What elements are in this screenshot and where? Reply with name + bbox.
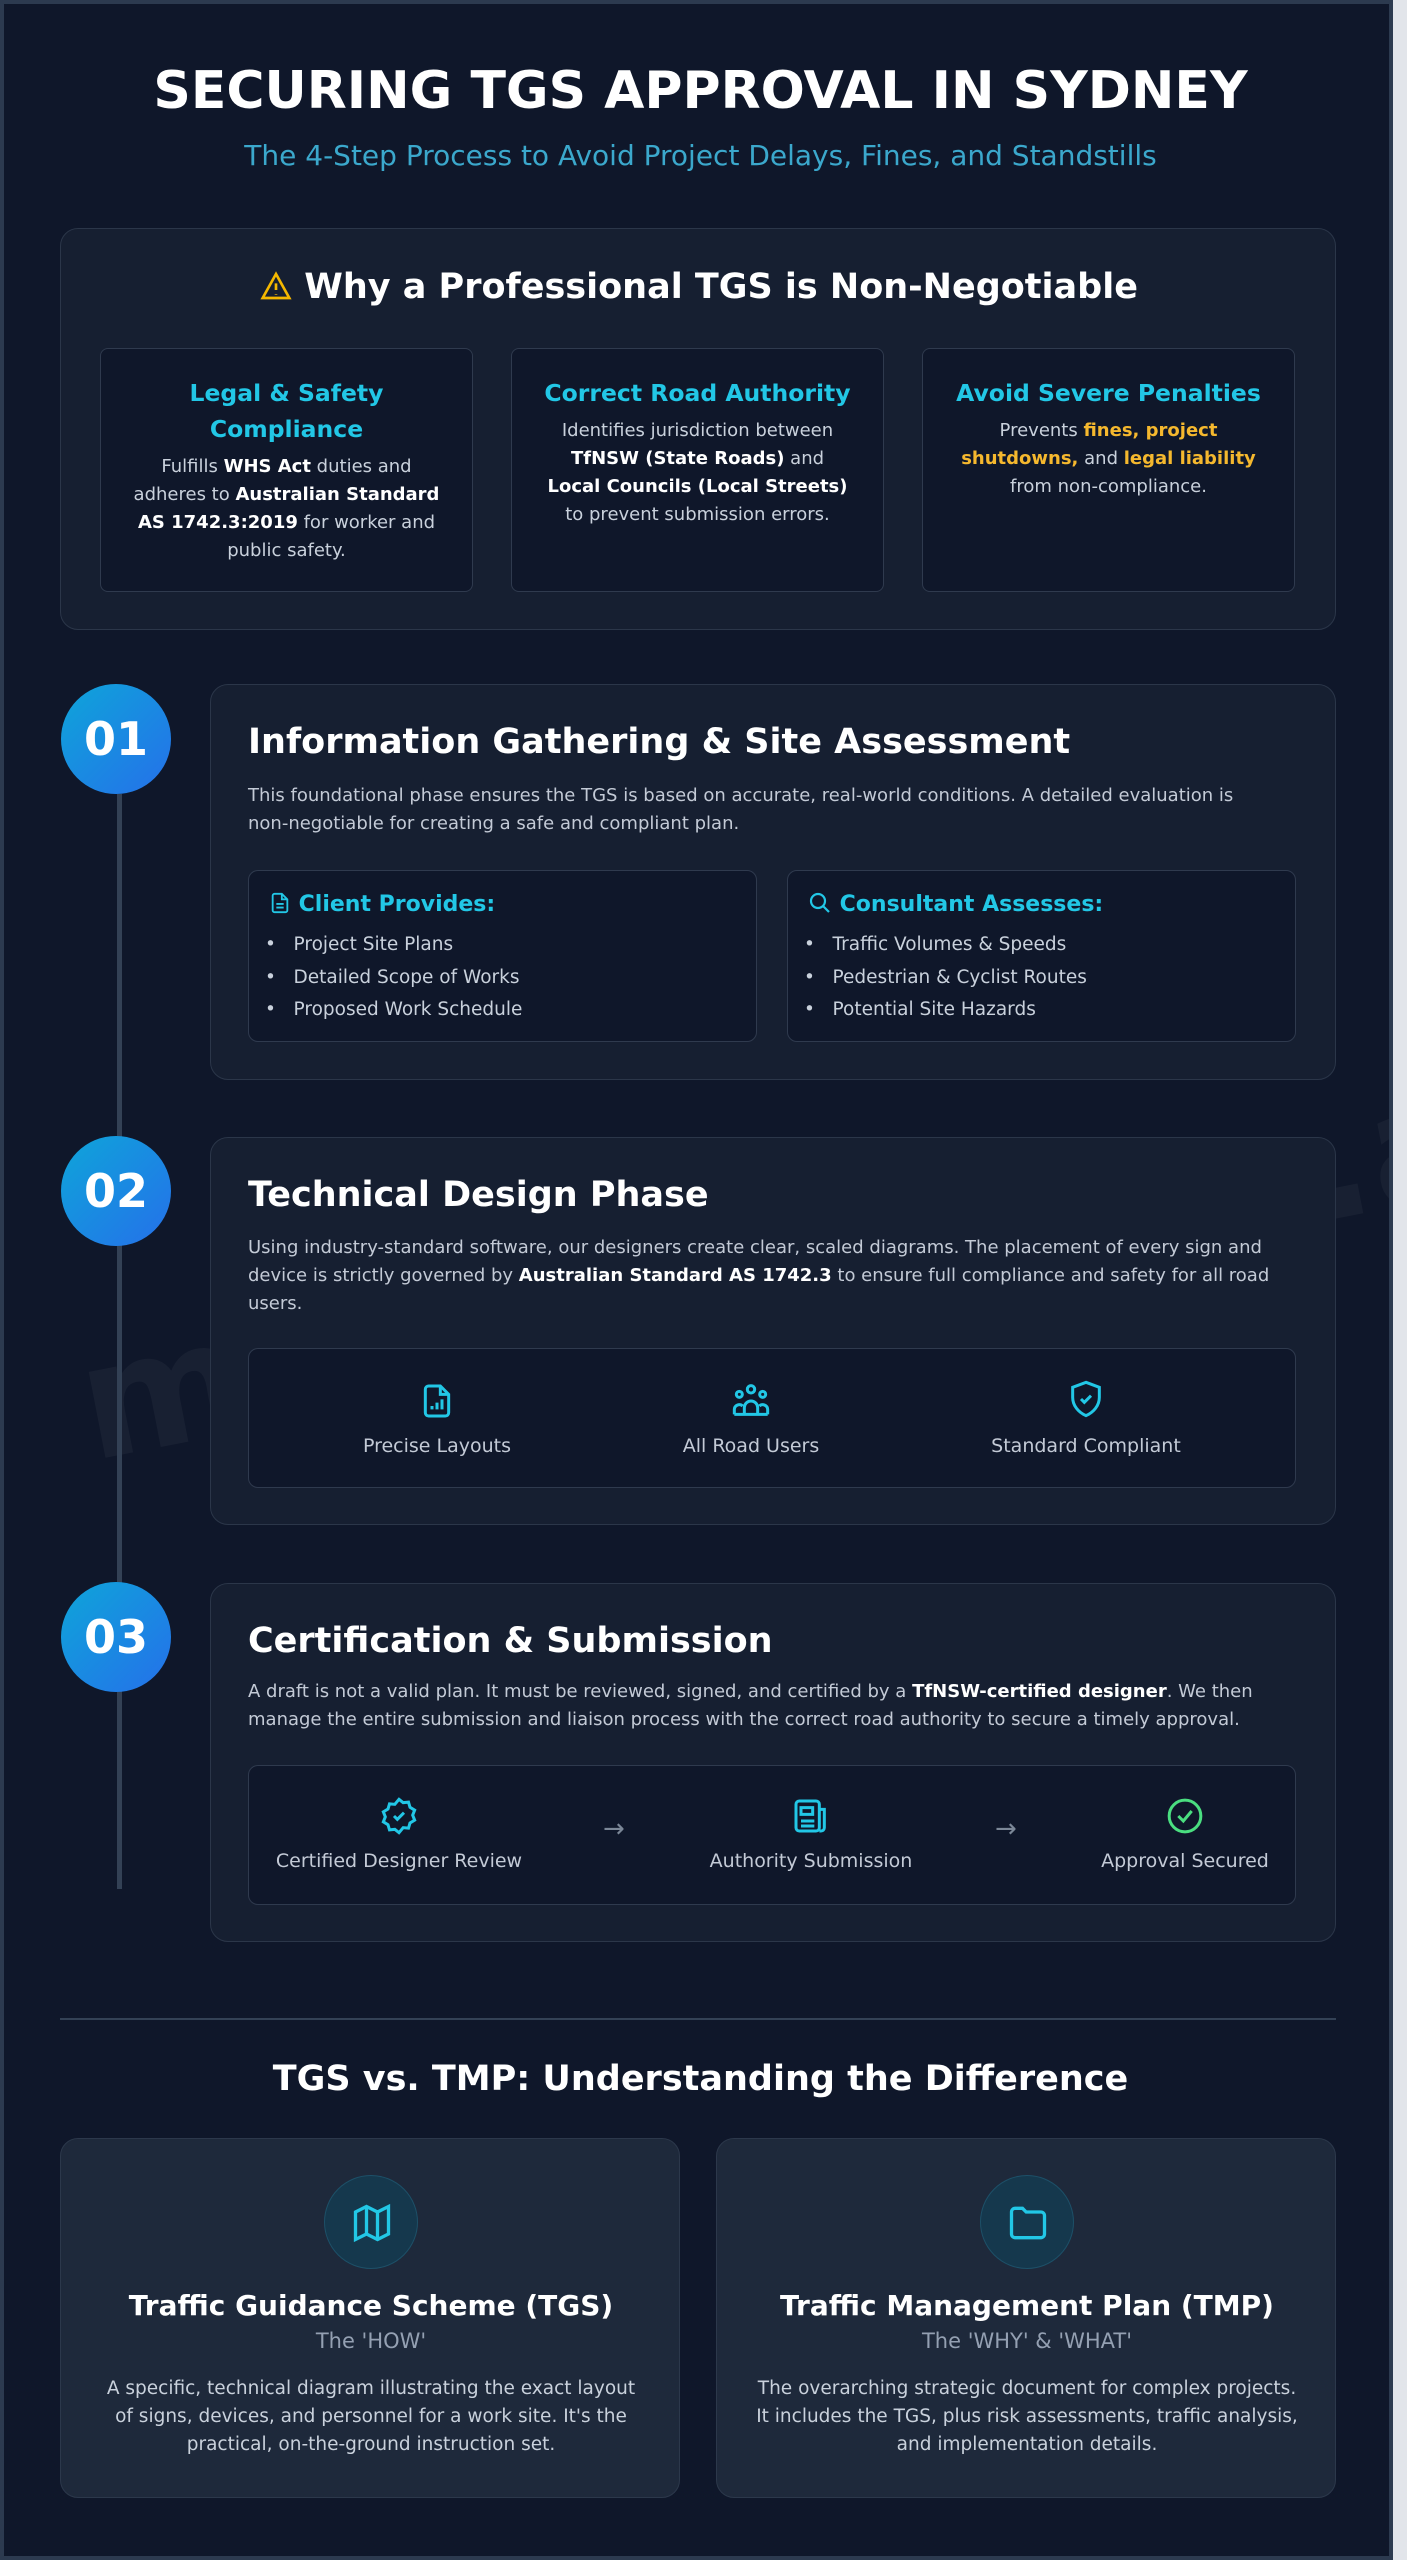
icon: newspaper	[794, 1800, 826, 1832]
card: TGS	[60, 2138, 680, 2498]
label: compliant: Standard Compliant	[991, 1435, 1181, 1457]
timeline line	[117, 794, 122, 1889]
TMP subtitle: The 'WHY' & 'WHAT'	[922, 2329, 1132, 2353]
step 1 heading: Information Gathering & Site Assessment	[248, 722, 1070, 762]
step 3 circle	[61, 1582, 171, 1692]
step 3 description: A draft is not a valid plan. It must be reviewed, signed, and certified by a TfNSW-certified designer. We then manage the entire submission and liaison process with the correct road authority to secure a timely approval.	[248, 1681, 1253, 1730]
heading: TGS vs TMP: TGS vs. TMP: Understanding the Difference	[273, 2059, 1128, 2099]
step 2 circle	[61, 1136, 171, 1246]
step 3 circle: 03	[84, 1610, 148, 1664]
card: legal: Fulfills WHS Act duties and adheres to Australian Standard AS 1742.3:2019 for worker and public safety.	[134, 456, 439, 561]
panel: step 3	[210, 1583, 1336, 1942]
features box	[248, 1348, 1296, 1488]
TMP title: Traffic Management Plan (TMP)	[780, 2289, 1274, 2322]
process box	[248, 1765, 1296, 1905]
arrow 1: →	[603, 1814, 625, 1844]
box: consultant assesses: Consultant Assesses:	[840, 892, 1103, 917]
step 1 circle	[61, 684, 171, 794]
step 2 description: Using industry-standard software, our designers create clear, scaled diagrams. The placement of every sign and device is strictly governed by Australian Standard AS 1742.3 to ensure full compliance and safety for all road users.	[248, 1237, 1269, 1314]
box: client provides: • Proposed Work Schedule	[265, 999, 522, 1020]
card: authority: Local Councils (Local Streets) to prevent submission errors.	[547, 476, 848, 525]
card: legal: Legal & Safety Compliance	[189, 379, 384, 443]
step 1 description: This foundational phase ensures the TGS is based on accurate, real-world conditions. A detailed evaluation is non‑negotiable for creating a safe and compliant plan.	[248, 785, 1233, 834]
card: TMP	[716, 2138, 1336, 2498]
label: authority submission: Authority Submission	[710, 1850, 912, 1872]
TGS subtitle: The 'HOW'	[316, 2329, 426, 2353]
title: SECURING TGS APPROVAL IN SYDNEY	[153, 61, 1248, 121]
label: precise: Precise Layouts	[363, 1435, 511, 1457]
card: authority: Correct Road Authority	[544, 379, 851, 407]
box: consultant assesses: • Potential Site Hazards	[804, 999, 1036, 1020]
card: penalties: Avoid Severe Penalties	[956, 379, 1261, 407]
step 1 circle: 01	[84, 712, 148, 766]
icon: document chart	[424, 1384, 450, 1418]
TGS title: Traffic Guidance Scheme (TGS)	[129, 2289, 613, 2322]
box: client provides: Client Provides:	[299, 892, 495, 917]
icon: users	[732, 1384, 770, 1416]
card: penalties	[922, 348, 1295, 592]
icon: badge check	[382, 1797, 416, 1835]
step 2 heading: Technical Design Phase	[248, 1175, 709, 1215]
box: consultant assesses: • Traffic Volumes & Speeds	[804, 934, 1066, 955]
icon: check circle	[1168, 1798, 1202, 1834]
subtitle: The 4-Step Process to Avoid Project Delays, Fines, and Standstills	[244, 139, 1157, 172]
card: penalties: Prevents fines, project shutdowns, and legal liability from non-compliance.	[961, 420, 1256, 497]
step 2 circle: 02	[84, 1164, 148, 1218]
label: road users: All Road Users	[683, 1435, 819, 1457]
TGS description: A specific, technical diagram illustrating the exact layout of signs, devices, and personnel for a work site. It's the practical, on-the-ground instruction set.	[107, 2378, 635, 2455]
box: client provides	[248, 870, 757, 1042]
card: authority	[511, 348, 884, 592]
box: client provides: • Detailed Scope of Works	[265, 966, 520, 988]
card: authority: Identifies jurisdiction between TfNSW (State Roads) and	[562, 420, 833, 469]
step 3 heading: Certification & Submission	[248, 1621, 773, 1661]
icon: folder	[980, 2175, 1074, 2269]
divider	[60, 2018, 1336, 2020]
arrow 2: →	[995, 1814, 1017, 1844]
label: certified review: Certified Designer Review	[276, 1850, 522, 1872]
panel: why professional TGS	[60, 228, 1336, 630]
card: legal	[100, 348, 473, 592]
heading: why: Why a Professional TGS is Non-Negotiable	[304, 267, 1138, 307]
panel: step 2	[210, 1137, 1336, 1525]
panel: step 1	[210, 684, 1336, 1080]
label: approval: Approval Secured	[1101, 1850, 1269, 1872]
icon: map	[324, 2175, 418, 2269]
box: consultant assesses	[787, 870, 1296, 1042]
box: consultant assesses: • Pedestrian & Cyclist Routes	[804, 966, 1087, 988]
TMP description: The overarching strategic document for complex projects. It includes the TGS, plus risk assessments, traffic analysis, and implementation details.	[756, 2378, 1298, 2455]
icon: shield check	[1071, 1380, 1101, 1418]
box: client provides: • Project Site Plans	[265, 934, 453, 955]
